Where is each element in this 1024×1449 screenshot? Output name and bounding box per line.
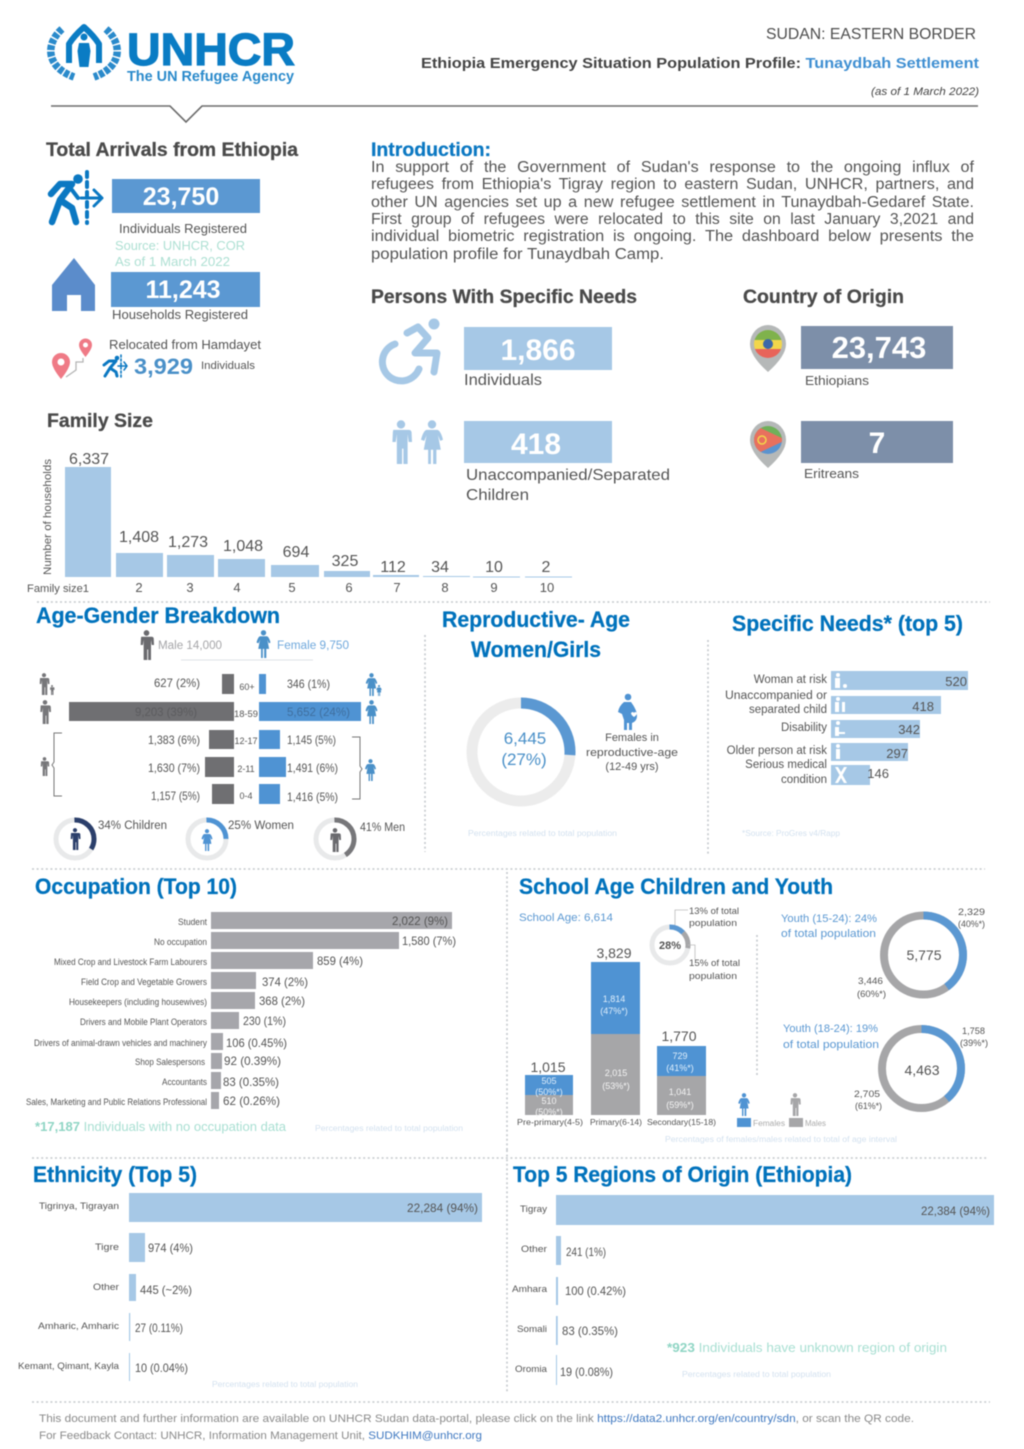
icon: relocation route pins — [52, 338, 92, 379]
bar chart: occupation: 230 (1%) — [243, 1014, 286, 1028]
donut: youth 18-24 — [854, 1026, 988, 1112]
note: no occupation data: *17,187 Individuals with no occupation data — [35, 1119, 287, 1134]
introduction text: In support of the Government of Sudan's response to the ongoing influx of — [371, 159, 975, 176]
stat box: Ethiopians: 23,743 — [832, 330, 926, 365]
bar chart: regions: Oromia — [515, 1364, 548, 1375]
stat box: households: 11,243 — [145, 276, 221, 304]
bar chart: specific needs: Unaccompanied or — [725, 690, 827, 702]
bar chart: ethnicity: Tigre — [95, 1242, 119, 1253]
population pyramid: 1,157 (5%) — [151, 789, 200, 803]
panel: reproductive-age women — [442, 607, 678, 838]
source note: As of 1 March 2022 — [115, 254, 230, 269]
bar chart: ethnicity: 22,284 (94%) — [407, 1201, 478, 1215]
stat box: households — [111, 272, 260, 307]
bar chart: family size: 1,273 — [168, 534, 208, 551]
header: location: SUDAN: EASTERN BORDER — [766, 26, 976, 43]
bar chart: family size: 6 — [345, 580, 353, 595]
bar chart: occupation: 2,022 (9%) — [392, 914, 448, 928]
label: households registered: Households Registered — [112, 307, 248, 322]
bar chart: occupation: No occupation — [154, 937, 207, 947]
bar chart: specific needs: 146 — [867, 766, 889, 781]
bar chart: specific needs: Disability — [781, 722, 827, 734]
stacked bar chart: school levels: (53%*) — [602, 1081, 630, 1091]
stacked bar chart: school levels — [517, 945, 716, 1127]
donut: school age share: population — [689, 971, 737, 982]
logo wordmark: UNHCR — [127, 24, 295, 75]
donut: reproductive age — [472, 703, 570, 801]
stacked bar chart: school levels: 729 — [672, 1051, 688, 1061]
bar chart: occupation: Student — [178, 917, 207, 927]
note: unknown region: *923 Individuals have unknown region of origin — [667, 1340, 947, 1355]
donut: youth 18-24: 4,463 — [904, 1062, 940, 1078]
footer: This document and further information are available on UNHCR Sudan data-portal, please click on the link https://data2.unhcr.org/en/country/sdn , or scan the QR code. — [39, 1413, 914, 1425]
population pyramid: 627 (2%) — [154, 676, 200, 690]
bar chart: family size: 1,048 — [223, 538, 263, 555]
donut: youth 15-24: 3,446 — [858, 976, 883, 987]
bar chart: occupation: Sales, Marketing and Public Relations Professional — [26, 1097, 207, 1107]
population pyramid: 9,203 (39%) — [135, 705, 197, 719]
bar chart: family size: 1,408 — [119, 529, 159, 546]
label: school age total: School Age: 6,614 — [519, 912, 613, 924]
bar chart: occupation: 106 (0.45%) — [226, 1036, 287, 1050]
bar chart: family size: 2 — [135, 580, 143, 595]
bar chart: occupation: 83 (0.35%) — [223, 1075, 279, 1089]
heading: specific needs: Specific Needs* (top 5) — [732, 611, 963, 636]
stacked bar chart: school levels: (59%*) — [666, 1100, 694, 1110]
donut: youth 15-24: 5,775 — [906, 947, 942, 963]
stat box: Eritreans: 7 — [869, 427, 885, 460]
bar chart: family size: Family size1 — [27, 583, 89, 595]
donut: youth 15-24 — [857, 907, 985, 1000]
legend: male total — [141, 630, 222, 660]
stacked bar chart: school levels: (41%*) — [666, 1063, 694, 1073]
stacked bar chart: school levels: (47%*) — [600, 1006, 628, 1016]
bar chart: family size: 9 — [490, 580, 498, 595]
bar chart: specific needs: 342 — [898, 722, 920, 737]
panel: introduction — [371, 140, 975, 263]
stacked bar chart: school levels: 3,829 — [596, 945, 632, 961]
label: females in reproductive age: Females in — [605, 732, 659, 744]
bar chart: occupation: Mixed Crop and Livestock Farm Labourers — [54, 957, 207, 967]
bar chart: occupation: Field Crop and Vegetable Growers — [81, 977, 207, 987]
youth 15-24 label: of total population — [781, 928, 876, 940]
introduction text: population profile for Tunaydbah Camp. — [371, 246, 664, 263]
donut: children: 34% Children — [98, 820, 167, 832]
stat box: individuals with needs — [464, 327, 612, 370]
stacked bar chart: school levels: Pre-primary(4-5) — [517, 1117, 583, 1127]
icon: small person crossing — [104, 355, 127, 377]
population pyramid — [69, 674, 361, 804]
introduction text: refugees from Ethiopia's Tigray region to eastern Sudan, UNHCR, partners, and — [371, 176, 974, 193]
icons: female age groups — [365, 673, 382, 781]
population pyramid: 2-11 — [237, 764, 255, 774]
bar chart: specific needs: condition — [781, 774, 827, 786]
donut: youth 15-24: (40%*) — [958, 919, 985, 930]
heading: occupation: Occupation (Top 10) — [35, 874, 237, 899]
header rule with notch — [51, 106, 978, 122]
icons: male age groups — [40, 673, 54, 776]
stacked bar chart: school levels: 1,814 — [603, 994, 625, 1004]
bar chart: family size: 6,337 — [69, 451, 109, 468]
bar chart: regions: Amhara — [512, 1284, 548, 1295]
bar chart: specific needs: 520 — [945, 674, 967, 689]
bar chart: regions: Tigray — [520, 1204, 547, 1215]
panel: top 5 regions of origin — [512, 1162, 994, 1385]
stat box: Ethiopians — [801, 326, 953, 369]
bar chart: regions: Other — [521, 1244, 547, 1255]
population pyramid: 12-17 — [234, 736, 258, 746]
bar chart: specific needs: Older person at risk — [727, 745, 827, 757]
bar chart: ethnicity: Kemant, Qimant, Kayla — [18, 1361, 120, 1372]
donut: youth 18-24: 1,758 — [962, 1026, 985, 1037]
bar chart: family size — [27, 451, 572, 595]
panel: occupation — [26, 874, 463, 1134]
bar chart: regions: 100 (0.42%) — [565, 1284, 626, 1298]
population pyramid: 0-4 — [239, 791, 253, 801]
donut: youth 18-24: (39%*) — [960, 1038, 988, 1049]
label: Eritreans: Eritreans — [804, 466, 860, 481]
population pyramid: 1,383 (6%) — [148, 733, 200, 747]
stat box: unaccompanied children — [464, 421, 612, 463]
logo tagline: The UN Refugee Agency — [127, 68, 295, 85]
note: percentages: Percentages related to total population — [682, 1370, 831, 1379]
youth 18-24 label: Youth (18-24): 19% — [783, 1023, 878, 1035]
bar chart: family size: 34 — [431, 559, 449, 576]
youth 18-24 label — [783, 1023, 879, 1051]
bar chart: ethnicity: Amharic, Amharic — [38, 1321, 119, 1332]
panel: total arrivals — [46, 140, 298, 379]
bar chart: occupation: 374 (2%) — [262, 975, 308, 989]
population pyramid: 60+ — [239, 682, 255, 692]
bar chart: ethnicity: 974 (4%) — [148, 1241, 193, 1255]
stacked bar chart: school levels: 505 — [541, 1076, 557, 1086]
icon: two children — [392, 420, 443, 464]
heading: regions of origin: Top 5 Regions of Origin (Ethiopia) — [513, 1162, 852, 1187]
footer — [39, 1413, 914, 1442]
bar chart: occupation: 92 (0.39%) — [224, 1054, 281, 1068]
stat box: unaccompanied children: 418 — [511, 428, 561, 461]
label: individuals registered: Individuals Registered — [119, 222, 247, 236]
icon: UNHCR emblem — [51, 27, 117, 77]
bar chart: occupation: Drivers of animal-drawn vehicles and machinery — [34, 1038, 207, 1048]
note: percentages of age interval: Percentages of females/males related to total of age interval — [665, 1135, 897, 1144]
icon: pregnant woman — [618, 694, 637, 730]
heading: reproductive-age women and girls: Women/Girls — [471, 637, 601, 662]
source note: Source: UNHCR, COR — [115, 238, 245, 253]
donut: women — [188, 820, 294, 858]
donut: school age share: population — [689, 918, 737, 929]
heading: age-gender breakdown: Age-Gender Breakdown — [36, 603, 280, 628]
legend: females and males: Females — [753, 1119, 785, 1128]
donut: school age share: 13% of total — [689, 906, 739, 917]
bar chart: ethnicity: 10 (0.04%) — [135, 1361, 188, 1375]
panel: school age children and youth — [517, 874, 988, 1144]
bar chart: occupation — [26, 912, 456, 1109]
legend: females and males — [737, 1093, 826, 1128]
panel: ethnicity — [18, 1162, 482, 1389]
bar chart: family size: 2 — [542, 559, 551, 576]
bar chart: specific needs: separated child — [749, 704, 827, 716]
stacked bar chart: school levels: Secondary(15-18) — [647, 1117, 716, 1127]
introduction text: individual biometric registration is ongoing. The dashboard below presents the — [371, 228, 974, 245]
heading: persons with specific needs: Persons With Specific Needs — [371, 287, 637, 308]
donut: youth 15-24: 2,329 — [958, 907, 985, 918]
legend: females and males: Males — [805, 1119, 826, 1128]
bar chart: regions: 83 (0.35%) — [562, 1324, 618, 1338]
source note — [115, 238, 245, 269]
donut: school age share: 15% of total — [689, 958, 740, 969]
label: females in reproductive age: reproductive-age — [586, 747, 678, 759]
heading: family size: Family Size — [47, 411, 153, 432]
icon: wheelchair — [382, 318, 440, 381]
stacked bar chart: school levels: (50%*) — [535, 1087, 563, 1097]
header: UNHCR logo — [51, 24, 295, 85]
population pyramid: 18-59 — [234, 709, 258, 719]
heading: ethnicity: Ethnicity (Top 5) — [33, 1162, 197, 1187]
bar chart: regions: 22,384 (94%) — [921, 1204, 990, 1218]
label: females in reproductive age — [586, 732, 678, 773]
bar chart: family size: 10 — [540, 580, 554, 595]
bar chart: ethnicity: 27 (0.11%) — [135, 1321, 183, 1335]
panel: persons with specific needs — [371, 287, 670, 504]
label: unaccompanied or separated children: Children — [466, 487, 529, 504]
heading: introduction: Introduction: — [371, 140, 491, 161]
stacked bar chart: school levels: 2,015 — [605, 1068, 627, 1078]
bar chart: family size: 10 — [485, 559, 503, 576]
heading: school age children and youth: School Age Children and Youth — [519, 874, 833, 899]
donut: women: 25% Women — [228, 820, 294, 832]
donut: reproductive age: (27%) — [501, 750, 547, 769]
label: females in reproductive age: (12-49 yrs) — [605, 761, 659, 773]
stat box: individuals — [112, 179, 260, 213]
donut: youth 18-24: 2,705 — [854, 1089, 880, 1100]
legend: female total: Female 9,750 — [277, 640, 349, 652]
label: unaccompanied or separated children — [466, 467, 670, 504]
bar chart: family size: 694 — [283, 544, 309, 561]
youth 15-24 label — [781, 913, 877, 940]
bar chart: occupation: Shop Salespersons — [135, 1057, 205, 1067]
donut: school age share — [652, 906, 740, 982]
header: report title: Ethiopia Emergency Situation Population Profile: Tunaydbah Settlement — [421, 55, 979, 72]
bar chart: specific needs — [725, 671, 968, 786]
bar chart: family size: 4 — [233, 580, 241, 595]
youth 15-24 label: Youth (15-24): 24% — [781, 913, 877, 925]
bar chart: specific needs: 418 — [912, 699, 934, 714]
bar chart: family size: 325 — [332, 553, 358, 570]
bar chart: occupation: 859 (4%) — [317, 954, 363, 968]
donut: men — [316, 820, 405, 858]
panel: age-gender breakdown — [36, 603, 405, 858]
introduction text: other UN agencies set up a new refugee settlement in Tunaydbah-Gedaref State. — [371, 194, 974, 211]
label: unaccompanied or separated children: Unaccompanied/Separated — [466, 467, 670, 484]
stacked bar chart: school levels: (50%*) — [535, 1107, 563, 1117]
bar chart: occupation: 62 (0.26%) — [223, 1094, 280, 1108]
note: source: *Source: ProGres v4/Rapp — [742, 829, 841, 838]
bar chart: family size: 3 — [186, 580, 194, 595]
label: individuals: Individuals — [201, 360, 256, 372]
icon: house — [52, 258, 95, 311]
stacked bar chart: school levels: 1,015 — [530, 1059, 566, 1075]
population pyramid: 5,652 (24%) — [287, 705, 350, 719]
bar chart: occupation: Drivers and Mobile Plant Operators — [80, 1017, 207, 1027]
bar chart: occupation: 368 (2%) — [259, 994, 305, 1008]
bar chart: family size: 8 — [441, 580, 449, 595]
introduction text: First group of refugees were relocated to this site on last January 3,2021 and — [371, 211, 974, 228]
bar chart: regions: 241 (1%) — [566, 1245, 606, 1259]
heading: reproductive-age women and girls — [442, 607, 630, 662]
panel: family size — [27, 411, 572, 595]
bar chart: family size: 7 — [393, 580, 401, 595]
bar chart: ethnicity — [18, 1193, 482, 1381]
population pyramid: 1,491 (6%) — [287, 761, 338, 775]
bar chart: family size: 5 — [288, 580, 296, 595]
donut: reproductive age: 6,445 — [504, 729, 546, 748]
stacked bar chart: school levels: 510 — [541, 1096, 557, 1106]
bar chart: regions: 19 (0.08%) — [560, 1365, 613, 1379]
note: percentages: Percentages related to total population — [468, 829, 617, 838]
population pyramid: 1,145 (5%) — [287, 733, 336, 747]
donut: youth 15-24: (60%*) — [857, 989, 886, 1000]
stat: relocated count: 3,929 — [134, 354, 193, 379]
bar chart: family size: 112 — [380, 559, 406, 576]
note: percentages: Percentages related to total population — [212, 1380, 358, 1389]
bar chart: ethnicity: Tigrinya, Tigrayan — [39, 1201, 119, 1212]
stacked bar chart: school levels: 1,770 — [661, 1028, 697, 1044]
bar chart: regions — [512, 1195, 994, 1385]
bar chart: specific needs: Serious medical — [745, 759, 827, 771]
label: relocated from Hamdayet: Relocated from Hamdayet — [109, 338, 262, 352]
population pyramid: 1,416 (5%) — [287, 790, 338, 804]
legend: male total: Male 14,000 — [158, 640, 222, 652]
donut: school age share: 28% — [659, 940, 681, 952]
bar chart: occupation: Housekeepers (including housewives) — [69, 997, 207, 1007]
bar chart: occupation: 1,580 (7%) — [402, 934, 456, 948]
label: Ethiopians: Ethiopians — [805, 373, 870, 388]
donut: youth 18-24: (61%*) — [855, 1101, 882, 1112]
bar chart: specific needs: Woman at risk — [754, 674, 827, 686]
brackets: children — [52, 733, 362, 799]
bar chart: occupation: Accountants — [162, 1077, 207, 1087]
population pyramid: 1,630 (7%) — [148, 761, 200, 775]
panel: specific needs top 5 — [725, 611, 968, 838]
panel: country of origin — [743, 287, 953, 481]
bar chart: regions: Somali — [517, 1324, 547, 1335]
introduction text — [371, 159, 975, 263]
heading: total arrivals: Total Arrivals from Ethiopia — [46, 140, 298, 161]
bar chart: ethnicity: Other — [93, 1282, 119, 1293]
icon: person crossing border — [51, 172, 102, 223]
donut: children — [56, 820, 167, 858]
stat box: Eritreans — [801, 421, 953, 463]
header: date: (as of 1 March 2022) — [871, 86, 979, 98]
population pyramid: 346 (1%) — [287, 677, 330, 691]
donut: men: 41% Men — [360, 822, 405, 834]
bar chart: ethnicity: 445 (~2%) — [140, 1283, 192, 1297]
heading: country of origin: Country of Origin — [743, 287, 904, 308]
bar chart: specific needs: 297 — [886, 746, 908, 761]
youth 18-24 label: of total population — [783, 1039, 879, 1051]
label: individuals: Individuals — [464, 372, 542, 389]
footer: For Feedback Contact: UNHCR, Information Management Unit, SUDKHIM@unhcr.org — [39, 1430, 482, 1442]
heading: reproductive-age women and girls: Reproductive- Age — [442, 607, 630, 632]
legend: female total — [256, 630, 349, 658]
stacked bar chart: school levels: Primary(6-14) — [590, 1117, 642, 1127]
stacked bar chart: school levels: 1,041 — [669, 1087, 691, 1097]
note: percentages: Percentages related to total population — [315, 1124, 463, 1133]
stat box: individuals: 23,750 — [143, 183, 219, 211]
stat box: individuals with needs: 1,866 — [500, 334, 576, 367]
icon: Ethiopia map pin — [750, 325, 786, 372]
icon: Eritrea map pin — [750, 421, 786, 468]
axis title: Number of households — [42, 458, 54, 575]
